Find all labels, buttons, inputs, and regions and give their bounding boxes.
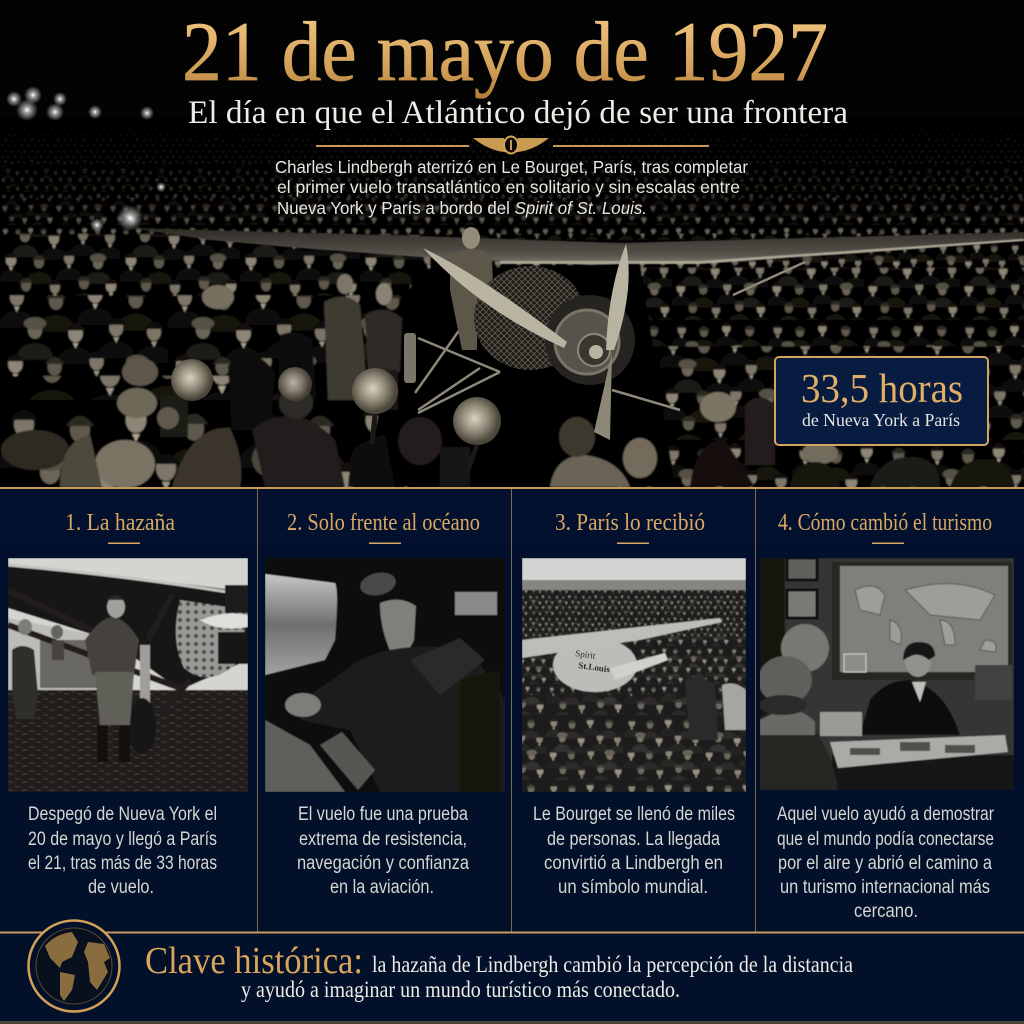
fuselage and engine: [474, 266, 635, 385]
body text 1: 20 de mayo y llegó a París: [28, 829, 217, 850]
intro paragraph: Charles Lindbergh aterrizó en Le Bourget, París, tras completar: [275, 157, 748, 177]
photo: Lindbergh beside plane: [8, 558, 248, 792]
body text 2: en la aviación.: [330, 877, 434, 898]
icon: globe: [28, 920, 120, 1012]
banner text: y ayudó a imaginar un mundo turístico más conectado.: [241, 977, 680, 1002]
heading 1: 1. La hazaña: [65, 509, 175, 536]
panel: París lo recibió: [522, 512, 746, 893]
banner heading: Clave histórica:: [145, 940, 363, 982]
body text 2: El vuelo fue una prueba: [298, 804, 468, 825]
stat callout: [775, 357, 988, 445]
wing: [130, 228, 1024, 265]
body text 1: el 21, tras más de 33 horas: [28, 853, 217, 874]
panel: Cómo cambió el turismo: [760, 512, 1014, 917]
body text 3: de personas. La llegada: [547, 829, 720, 850]
emblem: winged divider: [316, 136, 709, 154]
body text 3: [533, 804, 735, 898]
panel: Solo frente al océano: [265, 512, 505, 893]
banner: clave histórica: [0, 920, 1024, 1024]
panel: La hazaña: [8, 513, 248, 893]
intro paragraph: el primer vuelo transatlántico en solitario y sin escalas entre: [277, 177, 740, 197]
stadium flash lights: [6, 86, 166, 232]
foreground press and hats: [1, 285, 1015, 488]
body text 4: por el aire y abrió el camino a: [778, 853, 992, 874]
photo: pilot in cockpit: [265, 558, 505, 792]
gold rule under hero: [0, 487, 1024, 489]
body text 2: extrema de resistencia,: [299, 829, 467, 850]
body text 4: [777, 804, 995, 922]
propeller: [423, 244, 629, 440]
struts: [415, 262, 805, 413]
stat caption: de Nueva York a París: [802, 410, 960, 430]
photo: travel agent with client: [758, 558, 1014, 790]
body text 3: un símbolo mundial.: [558, 877, 708, 898]
body text 2: navegación y confianza: [297, 853, 469, 874]
officers beside plane: [228, 274, 402, 430]
heading 2: 2. Solo frente al océano: [287, 509, 480, 536]
hero photograph: crowd and Spirit of St. Louis: [0, 0, 1024, 490]
body text 4: cercano.: [854, 901, 918, 922]
intro paragraph: [275, 157, 748, 218]
subtitle: El día en que el Atlántico dejó de ser una frontera: [188, 95, 848, 131]
dark floor under aircraft: [360, 262, 675, 487]
body text 2: [297, 804, 469, 898]
body text 1: de vuelo.: [88, 877, 154, 898]
body text 1: Despegó de Nueva York el: [28, 804, 217, 825]
stat value: 33,5 horas: [801, 365, 963, 411]
fuel cylinder: [404, 333, 416, 383]
body text 3: Le Bourget se llenó de miles: [533, 804, 735, 825]
heading 3: 3. París lo recibió: [555, 509, 705, 536]
intro paragraph: Nueva York y París a bordo del Spirit of St. Louis.: [277, 198, 647, 218]
banner text: [241, 952, 853, 1002]
pilot standing on aircraft: [450, 227, 493, 350]
photo: crowd at Le Bourget: St.Louis: [578, 660, 611, 674]
banner text: la hazaña de Lindbergh cambió la percepción de la distancia: [372, 952, 853, 977]
flash lamps: [171, 359, 501, 473]
title: 21 de mayo de 1927: [182, 5, 828, 99]
photo: crowd at Le Bourget: [522, 558, 746, 792]
column dividers: [257, 489, 756, 932]
body text 4: un turismo internacional más: [780, 877, 990, 898]
body text 3: convirtió a Lindbergh en: [544, 853, 723, 874]
body text 1: [28, 804, 217, 898]
photo: crowd at Le Bourget: Spirit: [575, 648, 596, 661]
